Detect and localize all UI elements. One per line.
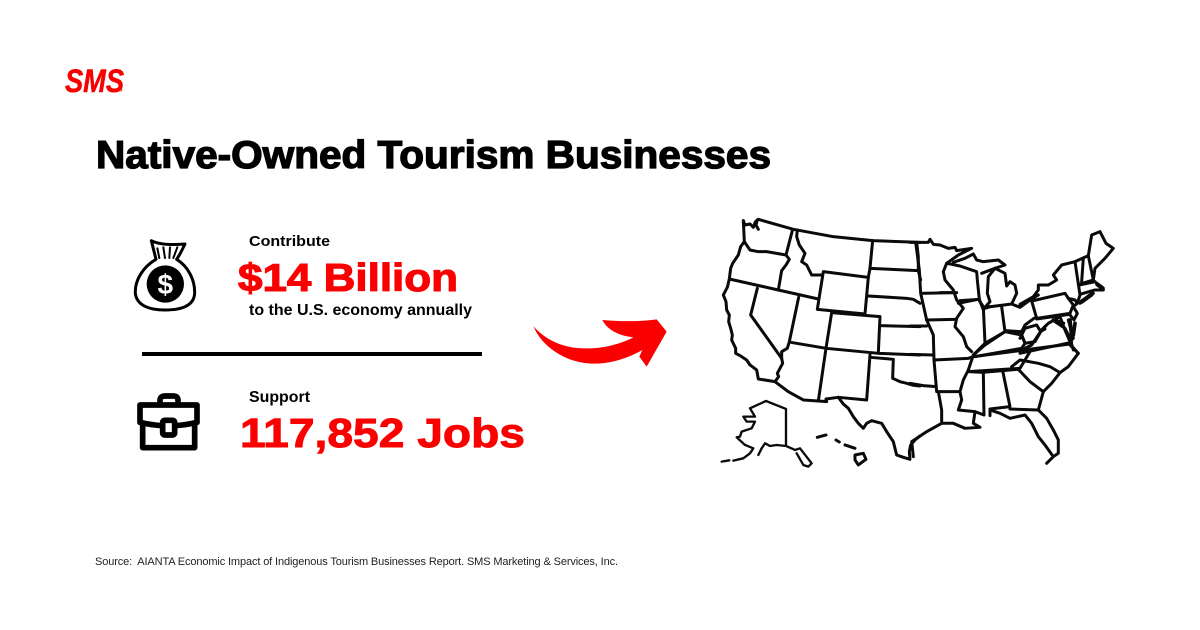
stat: 117,852 Jobs: 117,852 Jobs [240, 410, 525, 456]
map: United States [722, 219, 1113, 467]
title: Native-Owned Tourism Businesses [96, 134, 771, 177]
icon: money bag: $ [158, 269, 174, 300]
text: Support: Support [249, 389, 310, 406]
source note: Source: AIANTA Economic Impact of Indigenous Tourism Businesses Report. SMS Marketing & Services, Inc. [95, 556, 618, 568]
arrow [533, 319, 667, 367]
text: Contribute: Contribute [249, 233, 330, 250]
stat: $14 Billion: $14 Billion [238, 257, 458, 300]
logo: SMS: ® [120, 88, 123, 93]
icon: briefcase [140, 396, 197, 448]
text: to the U.S. economy annually: to the U.S. economy annually [249, 302, 472, 319]
icon: money bag [135, 241, 195, 310]
logo: SMS: SMS [65, 63, 125, 99]
